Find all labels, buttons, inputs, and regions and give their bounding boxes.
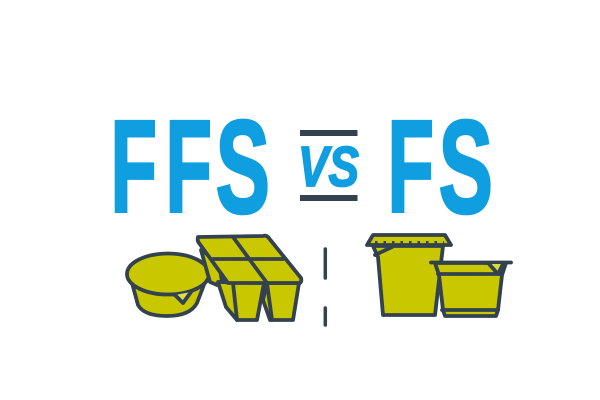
vs badge: VS — [298, 135, 359, 199]
heading: FFS: F — [110, 93, 157, 240]
heading: FFS: S — [216, 94, 270, 241]
heading: FFS — [110, 93, 270, 241]
icon: FS tall cup — [367, 235, 451, 315]
heading: FS — [388, 93, 493, 241]
divider: dashed line — [324, 249, 327, 325]
icon: FFS four-cup tray — [198, 236, 301, 320]
icon: FFS round bowl — [127, 254, 209, 316]
heading: FFS: F — [166, 93, 212, 240]
heading: FS: S — [439, 94, 493, 241]
heading: FS: F — [388, 93, 434, 240]
icon: FS short cup — [431, 262, 511, 316]
